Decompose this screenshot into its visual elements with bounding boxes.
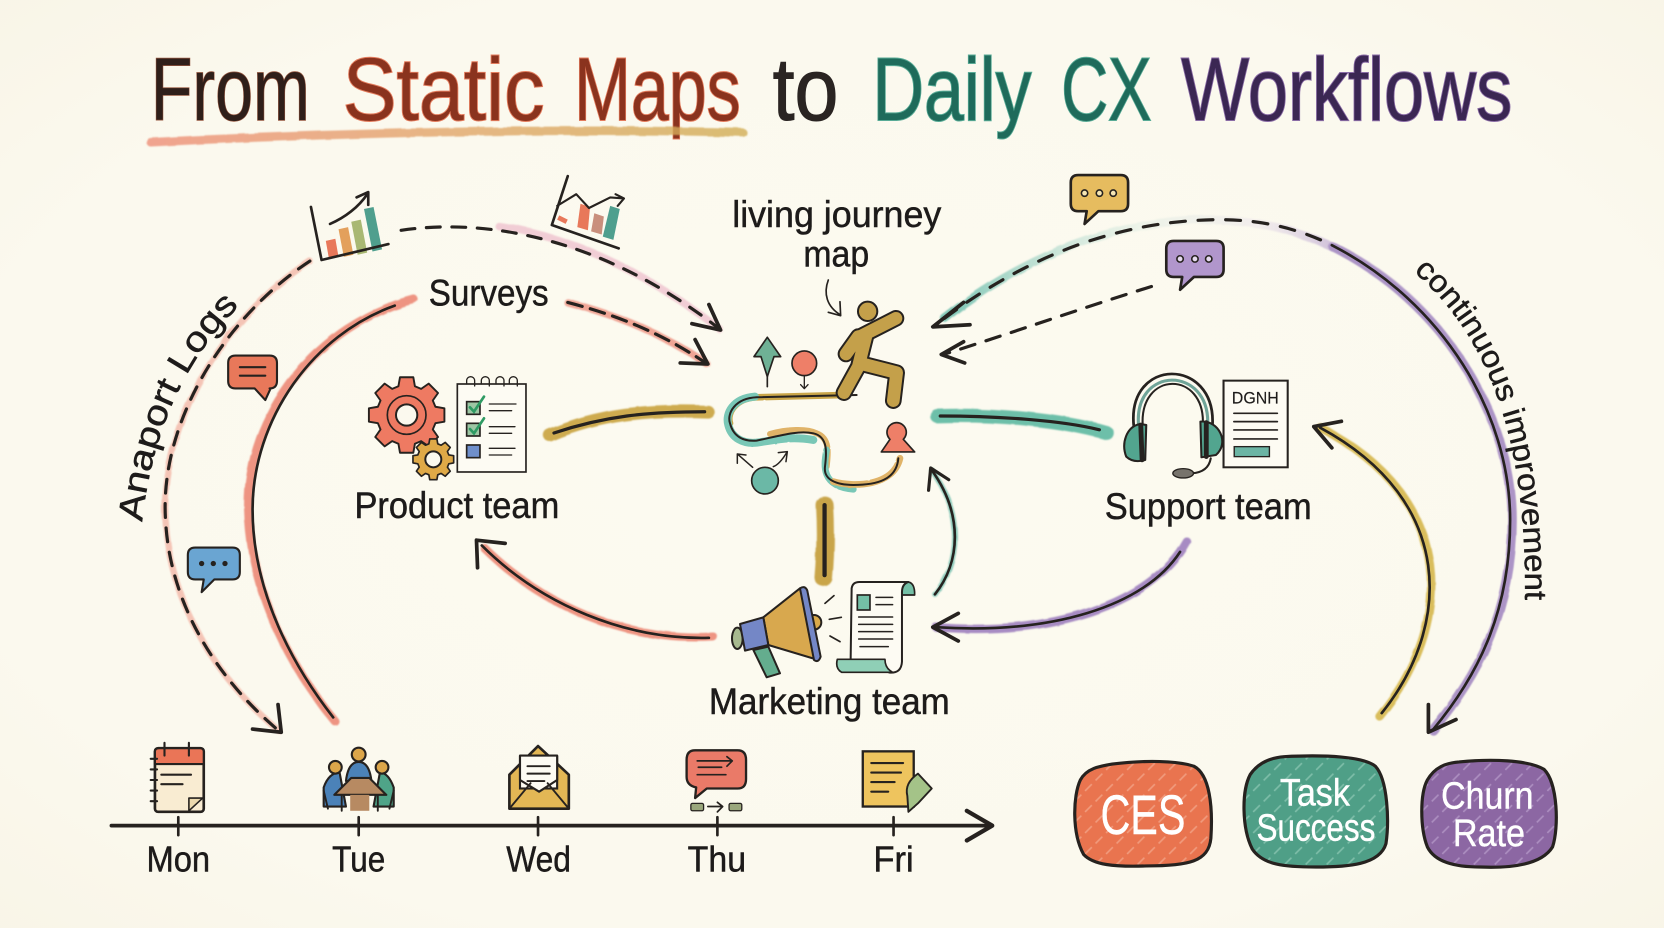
label: Surveys: Surveys	[429, 272, 549, 314]
title: From	[151, 39, 310, 139]
icon: blue speech bubble	[188, 548, 240, 592]
arrow: Support to Marketing	[933, 541, 1186, 641]
panel: KPI badges	[1075, 756, 1556, 867]
arrow: top dashed arc to journey map	[401, 226, 721, 330]
icon: megaphone	[732, 587, 841, 677]
icon: zigzag bar chart	[552, 176, 624, 248]
label: continuous improvement: continuous improvement	[1417, 262, 1546, 600]
icon: salmon speech bubble	[228, 356, 277, 400]
badge: CES	[1075, 761, 1211, 866]
arrow: KPI to Support	[1314, 421, 1431, 716]
timeline axis	[111, 811, 992, 840]
badge: Churn Rate: Churn	[1441, 775, 1533, 818]
label: Anaport Logs: Anaport Logs	[119, 296, 236, 522]
icon: gears	[369, 377, 454, 480]
arrow: Marketing to journey map	[929, 468, 955, 594]
badge: Task Success: Success	[1256, 806, 1375, 849]
person marker	[881, 423, 915, 452]
label: Product team: Product team	[354, 484, 559, 526]
timeline	[111, 743, 992, 879]
link: Marketing to journey map	[824, 505, 825, 577]
arrow: Marketing to Product	[476, 540, 713, 638]
badge: Churn Rate	[1422, 760, 1556, 867]
badge: CES: CES	[1100, 784, 1185, 846]
label: living journey map: living journey	[732, 193, 942, 235]
icon: Wednesday envelope	[509, 746, 569, 809]
title: CX	[1061, 39, 1151, 139]
icon: Monday notebook	[151, 743, 204, 812]
up arrow	[754, 337, 781, 387]
icon: headset	[1124, 374, 1222, 478]
icon: Thursday chat	[687, 750, 746, 812]
label: Thu: Thu	[688, 838, 746, 879]
icon: Tuesday meeting	[324, 748, 394, 811]
arrow: Anaport Logs dashed arc	[165, 261, 310, 732]
arrow: purple dashed to journey map	[941, 287, 1151, 363]
title underline	[151, 131, 743, 142]
title: Maps	[574, 39, 741, 139]
title	[151, 39, 1512, 139]
label: Mon: Mon	[146, 838, 210, 879]
arrow: Surveys dashed to journey map	[568, 302, 708, 364]
label: Fri: Fri	[873, 838, 914, 879]
icon: gold speech bubble	[1071, 175, 1128, 224]
icon: rising bar chart	[311, 192, 388, 260]
label: Tue: Tue	[332, 838, 385, 879]
link: Support to journey map	[937, 416, 1107, 433]
icon: support document	[1224, 381, 1288, 467]
runner figure	[844, 302, 897, 401]
icon: living journey map cluster	[728, 280, 915, 494]
icon: Friday note	[863, 751, 932, 812]
title: Static	[343, 39, 544, 139]
pointer arrow	[826, 280, 841, 316]
label: Wed: Wed	[506, 838, 571, 879]
badge: Task Success: Task	[1280, 771, 1351, 814]
label: Marketing team: Marketing team	[709, 680, 950, 722]
label: living journey map	[732, 193, 942, 274]
icon: checklist	[457, 377, 526, 472]
title: Daily	[872, 39, 1032, 139]
icon: scroll document	[837, 582, 915, 673]
title: to	[773, 39, 838, 139]
arrow: Surveys solid arc to Tue	[248, 299, 414, 722]
label: living journey map: map	[803, 232, 869, 274]
teal node	[737, 452, 787, 494]
title: Workflows	[1181, 39, 1512, 139]
icon: purple speech bubble	[1166, 241, 1224, 290]
badge: Churn Rate: Rate	[1453, 812, 1525, 855]
panel: Product team	[354, 377, 559, 526]
label: Support team: Support team	[1105, 485, 1312, 527]
journey path	[728, 395, 900, 489]
balloon marker	[792, 351, 817, 389]
link: Product to journey map	[550, 411, 708, 435]
badge: Task Success	[1244, 756, 1387, 867]
icon: support document: DGNH	[1232, 389, 1279, 407]
arrow: continuous improvement arc	[933, 220, 1512, 732]
panel: Support team	[1105, 374, 1312, 527]
panel: Marketing team	[709, 582, 950, 722]
